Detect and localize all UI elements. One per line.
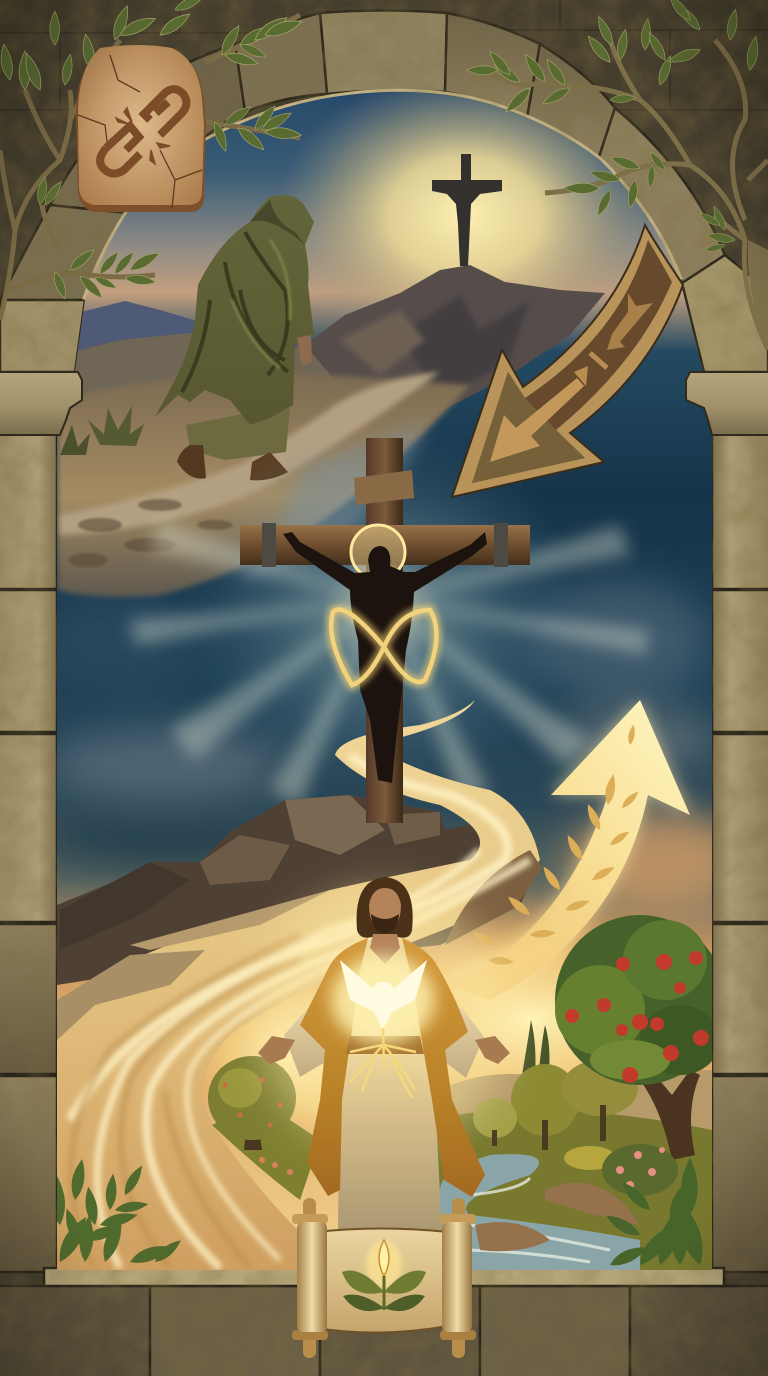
icon: broken chain tablet <box>76 45 206 212</box>
rocky outcrop <box>57 795 540 985</box>
small orchard tree and meadow <box>208 1056 320 1200</box>
cloak panels <box>300 938 368 1196</box>
arch stones <box>0 10 768 372</box>
sprout icon <box>342 1240 426 1311</box>
belt <box>346 1036 424 1054</box>
bronze downward arrow <box>452 225 683 497</box>
sky <box>50 90 720 1280</box>
rocky ground and path <box>57 372 470 597</box>
right capital <box>686 372 768 435</box>
Jesus figure <box>258 877 510 1232</box>
chain icon <box>100 89 186 174</box>
olive branches <box>0 0 768 350</box>
arrow head panel <box>472 372 585 483</box>
central cross <box>240 438 530 823</box>
silhouette <box>283 532 487 783</box>
flower bushes <box>602 1144 678 1196</box>
river <box>440 1154 640 1270</box>
skirt of robe <box>338 1040 442 1232</box>
sun glow <box>290 92 639 304</box>
distant cross <box>432 154 502 266</box>
lower landscape glow <box>206 896 626 1116</box>
clouds <box>40 580 750 910</box>
hands <box>258 1036 510 1064</box>
scroll with sprout <box>292 1198 476 1358</box>
cloaked traveller <box>155 195 314 480</box>
branch left <box>0 0 303 320</box>
fruit tree <box>555 915 725 1160</box>
distant mountains <box>75 301 333 398</box>
golden winding path <box>57 700 542 1270</box>
dove <box>331 956 435 1044</box>
fern left <box>57 1159 181 1263</box>
far fields <box>430 1020 712 1270</box>
central glow <box>214 463 547 758</box>
central rays <box>130 520 650 805</box>
hair <box>357 877 413 938</box>
left pillar blocks <box>0 432 57 1272</box>
bottom sill blocks <box>0 1268 768 1376</box>
window scene <box>57 92 712 1270</box>
left capital <box>0 372 82 435</box>
branch right <box>467 0 768 350</box>
capitals <box>0 372 768 435</box>
right rock beside path <box>445 850 542 945</box>
chest of robe <box>362 940 420 1036</box>
roots <box>350 1028 416 1098</box>
infinity symbol <box>331 610 436 685</box>
halo <box>351 525 405 579</box>
robe and sandals <box>186 405 290 460</box>
sleeves <box>284 1008 325 1077</box>
band symbols <box>574 366 588 386</box>
large inset arrow <box>490 378 584 462</box>
right pillar blocks <box>712 432 768 1272</box>
upward glowing arrow <box>440 700 690 1000</box>
face <box>369 888 401 934</box>
calvary hill <box>305 265 605 412</box>
fern right <box>606 1158 702 1266</box>
arch inner lit edge <box>85 92 680 300</box>
cloak <box>155 195 314 425</box>
